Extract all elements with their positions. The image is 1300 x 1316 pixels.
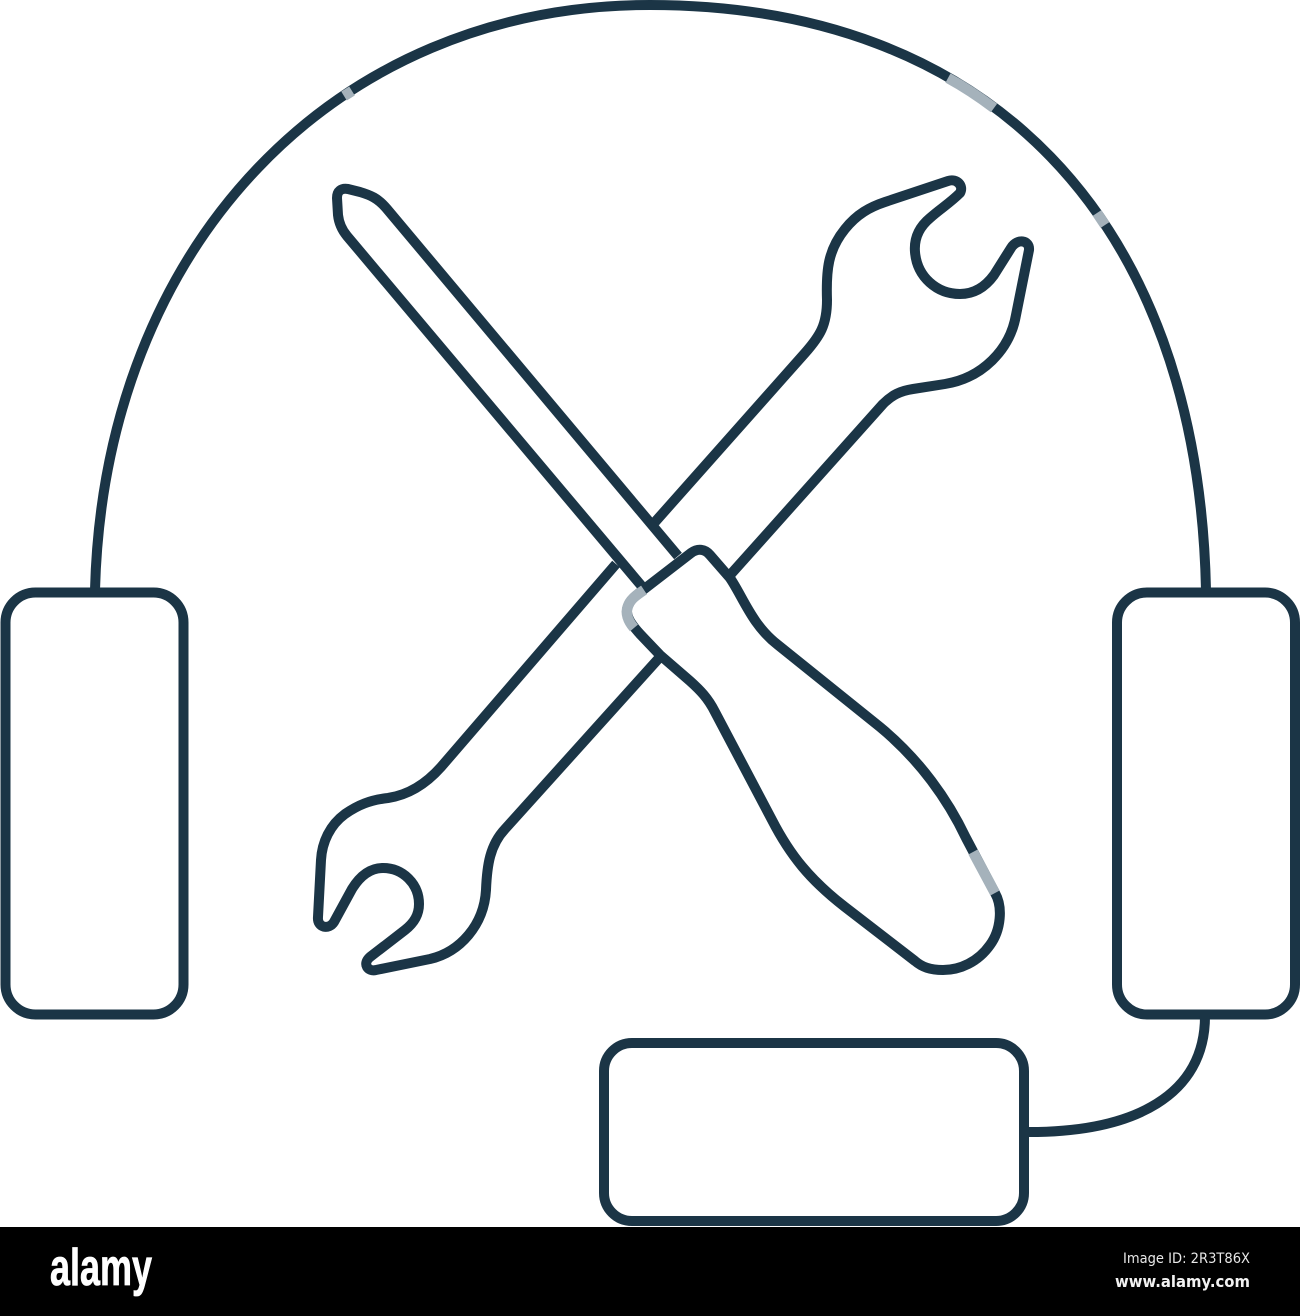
- wrench lower half: [318, 564, 660, 970]
- microphone box: [604, 1043, 1024, 1221]
- image id: Image ID: 2R3T86X: [1123, 1251, 1250, 1267]
- screwdriver handle: [627, 550, 1000, 970]
- screwdriver shaft: [337, 189, 678, 590]
- left ear cup: [6, 592, 184, 1014]
- wrench upper half: [655, 180, 1029, 574]
- footer bar: [0, 1227, 1300, 1316]
- website: www.alamy.com: [1115, 1272, 1250, 1291]
- headband arc: [95, 5, 1206, 590]
- alamy logo: alamy: [50, 1239, 152, 1297]
- microphone cable: [1029, 1016, 1205, 1132]
- right ear cup: [1117, 592, 1295, 1014]
